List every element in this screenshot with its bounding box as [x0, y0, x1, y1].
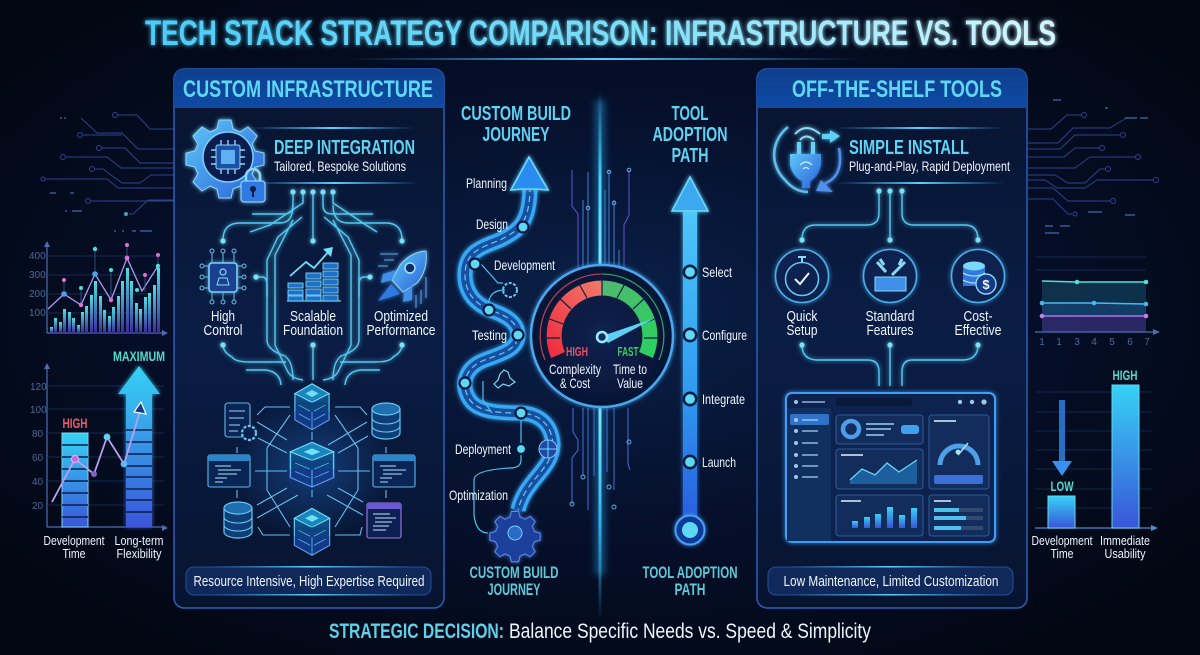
heading: deep integration: Tailored, Bespoke Solutions [274, 158, 406, 174]
dashboard mockup [786, 393, 995, 542]
chart: low dev time vs high usability: Usability [1104, 546, 1146, 561]
label: cost-effective [954, 308, 1002, 339]
chart: stable lines [1035, 257, 1160, 348]
icon: gear with chip and lock [186, 120, 265, 202]
central column beam [570, 90, 631, 620]
label: scalable foundation [283, 308, 343, 339]
journey step labels: Deployment [455, 441, 511, 457]
label: optimized performance [366, 308, 436, 339]
gauge: & Cost [560, 375, 590, 391]
heading: custom build journey: JOURNEY [482, 124, 550, 146]
chart: stable lines: 5 [1109, 337, 1115, 348]
chart: low dev time vs high usability: Immediate [1100, 533, 1150, 548]
heading: tool adoption path: ADOPTION [652, 124, 728, 146]
chart: development time vs flexibility: 40 [32, 477, 44, 488]
heading: deep integration [274, 137, 415, 174]
panel: custom infrastructure [174, 69, 444, 608]
callout: low maintenance [768, 566, 1013, 596]
heading: simple install: Plug-and-Play, Rapid Deployment [849, 158, 1010, 174]
icon: toolbox [864, 250, 916, 302]
label: high control: High [211, 308, 235, 325]
gauge: Value [617, 375, 643, 391]
panel: off-the-shelf tools [757, 69, 1027, 608]
chart: spark bars and line: 100 [29, 308, 46, 319]
heading: simple install [849, 137, 1010, 174]
panel header: OFF-THE-SHELF TOOLS [792, 76, 1002, 103]
icon: high control [200, 249, 246, 304]
chart: stable lines: 6 [1127, 337, 1133, 348]
node cluster: servers and databases [208, 384, 415, 555]
chart: development time vs flexibility: Long-term [114, 533, 164, 548]
label: optimized performance: Performance [366, 322, 436, 339]
chart: stable lines: 3 [1074, 337, 1080, 348]
panel header: CUSTOM INFRASTRUCTURE [183, 76, 433, 103]
label: quick setup: Setup [786, 322, 818, 339]
chart: development time vs flexibility: 80 [32, 429, 44, 440]
strategic decision footer [329, 620, 871, 643]
chart: low dev time vs high usability: Time [1050, 546, 1074, 561]
chart: development time vs flexibility: 120 [30, 382, 47, 393]
label: optimized performance: Optimized [374, 308, 428, 325]
arrow: tool adoption path: Select [702, 264, 732, 280]
heading: simple install: SIMPLE INSTALL [849, 137, 969, 159]
chart: development time vs flexibility: 60 [32, 453, 44, 464]
caption: custom build journey [470, 563, 558, 599]
chart: development time vs flexibility: Time [62, 546, 86, 561]
caption: custom build journey: JOURNEY [488, 580, 541, 599]
gauge [531, 265, 673, 407]
icon: stopwatch [776, 250, 828, 302]
heading: tool adoption path: PATH [672, 145, 708, 167]
icon: coins [952, 250, 1004, 302]
callout: low maintenance: Low Maintenance, Limited Customization [784, 573, 998, 590]
label: quick setup [786, 308, 818, 339]
journey step labels: Development [494, 257, 555, 273]
chart: development time vs flexibility [30, 348, 168, 561]
heading: tool adoption path: TOOL [672, 103, 708, 125]
chart: spark bars and line: 200 [29, 289, 46, 300]
connectors [799, 188, 981, 386]
arrow: tool adoption path: Configure [702, 327, 747, 343]
chart: spark bars and line [29, 241, 168, 336]
gauge: HIGH [566, 344, 588, 359]
icon: rocket [378, 251, 426, 308]
arrow: tool adoption path: Launch [702, 454, 736, 470]
chart: stable lines: 4 [1091, 337, 1097, 348]
journey step labels [449, 175, 555, 503]
chart: low dev time vs high usability [1032, 367, 1158, 561]
custom build road [460, 157, 557, 533]
journey step labels: Optimization [449, 487, 508, 503]
chart: development time vs flexibility: Development [44, 533, 105, 548]
chart: development time vs flexibility: HIGH [62, 415, 88, 431]
heading: custom build journey [461, 103, 571, 146]
strategic decision footer: STRATEGIC DECISION: [329, 620, 504, 643]
label: quick setup: Quick [786, 308, 818, 325]
journey step labels: Design [476, 216, 508, 232]
icon: scalable foundation [287, 247, 341, 301]
connectors top [220, 189, 405, 385]
strategic decision footer: Balance Specific Needs vs. Speed & Simplicity [509, 620, 871, 643]
chart: low dev time vs high usability: Development [1032, 533, 1093, 548]
caption: tool adoption path [642, 563, 738, 599]
heading: custom build journey: CUSTOM BUILD [461, 103, 571, 125]
panel header [757, 69, 1027, 108]
label: standard features: Features [866, 322, 914, 339]
chart: development time vs flexibility: 100 [30, 405, 47, 416]
arrow: tool adoption path: Integrate [702, 391, 745, 407]
callout: resource intensive: Resource Intensive, High Expertise Required [194, 573, 424, 590]
chart: low dev time vs high usability: LOW [1050, 478, 1074, 494]
label: cost-effective: Effective [954, 322, 1002, 339]
label: scalable foundation: Foundation [283, 322, 343, 339]
chart: development time vs flexibility: Flexibility [116, 546, 162, 561]
chart: low dev time vs high usability: HIGH [1112, 367, 1138, 383]
journey step labels: Testing [472, 327, 507, 343]
caption: tool adoption path: TOOL ADOPTION [642, 563, 738, 582]
chart: development time vs flexibility: MAXIMUM [113, 348, 165, 364]
chart: development time vs flexibility: 20 [32, 501, 44, 512]
circuit traces right [1027, 100, 1158, 233]
icon: plug with wifi [774, 127, 840, 192]
chart: spark bars and line: 400 [29, 251, 46, 262]
arrow: tool adoption path [672, 177, 747, 544]
circuit traces left [41, 112, 174, 231]
label: high control: Control [204, 322, 242, 339]
heading: tool adoption path [652, 103, 728, 167]
gauge: Time to [613, 361, 647, 377]
gauge: FAST [618, 344, 639, 359]
callout: resource intensive [186, 566, 431, 596]
label: scalable foundation: Scalable [290, 308, 336, 325]
label: cost-effective: Cost- [964, 308, 992, 325]
icon: coins: $ [982, 277, 990, 292]
label: standard features [866, 308, 914, 339]
caption: tool adoption path: PATH [674, 580, 706, 599]
chart: spark bars and line: 300 [29, 270, 46, 281]
heading: deep integration: DEEP INTEGRATION [274, 137, 415, 159]
panel header [174, 69, 444, 108]
chart: stable lines: 1 [1039, 337, 1045, 348]
label: high control [204, 308, 242, 339]
icon: gear at journey start [490, 511, 540, 562]
label: standard features: Standard [866, 308, 914, 325]
chart: stable lines: 1 [1056, 337, 1062, 348]
chart: stable lines: 7 [1144, 337, 1150, 348]
caption: custom build journey: CUSTOM BUILD [470, 563, 558, 582]
gauge: Complexity [549, 361, 601, 377]
journey step labels: Planning [466, 175, 507, 191]
